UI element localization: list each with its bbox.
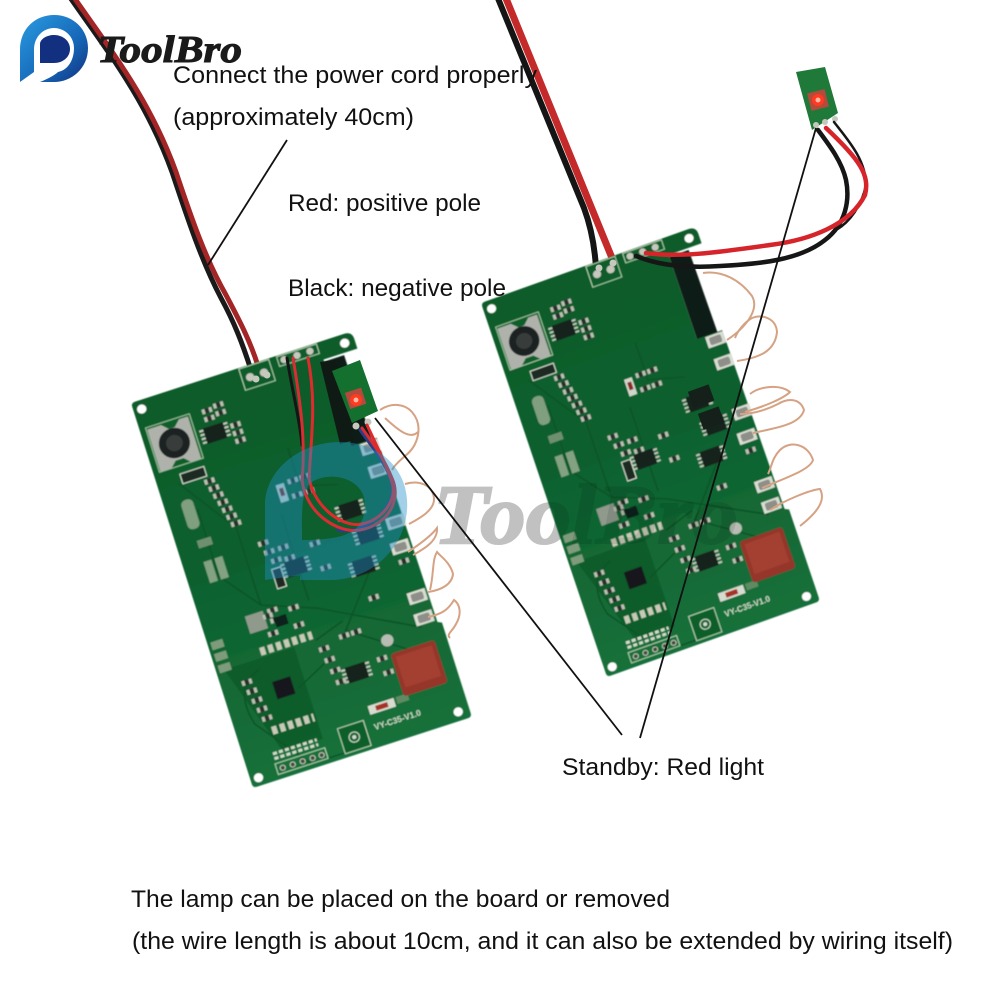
- left lamp wires: [287, 358, 395, 531]
- left circuit board: [131, 331, 474, 788]
- lamp note: (the wire length is about 10cm, and it can also be extended by wiring itself): [132, 928, 953, 955]
- right power cable: [497, 0, 612, 268]
- red wire label: Red: positive pole: [288, 190, 481, 217]
- right lamp wires: [636, 122, 866, 267]
- right board extra chips: [688, 384, 724, 430]
- lamp note: The lamp can be placed on the board or removed: [131, 886, 670, 913]
- left connector pads: [252, 372, 270, 382]
- right circuit board: [481, 226, 822, 677]
- right connector pads: [596, 260, 616, 272]
- power cord heading: (approximately 40cm): [173, 104, 414, 131]
- watermark text: ToolBro: [433, 468, 738, 562]
- icon: P mark: [20, 15, 88, 82]
- right lamp module: [796, 67, 838, 130]
- lamp note: [131, 886, 953, 955]
- left power cable: [69, 0, 258, 370]
- power cord heading: [173, 62, 537, 131]
- black wire label: Black: negative pole: [288, 275, 506, 302]
- left coil wires: [380, 405, 460, 638]
- logo wordmark: ToolBro: [97, 29, 242, 71]
- standby label: Standby: Red light: [562, 754, 764, 781]
- black leader lines: [208, 128, 816, 738]
- watermark logo: [265, 442, 407, 580]
- left lamp module: [320, 360, 378, 444]
- logo: [20, 15, 242, 82]
- power cord heading: Connect the power cord properly: [173, 62, 537, 89]
- faint watermark over board: ToolBro: [433, 468, 738, 562]
- right coil wires: [703, 272, 822, 526]
